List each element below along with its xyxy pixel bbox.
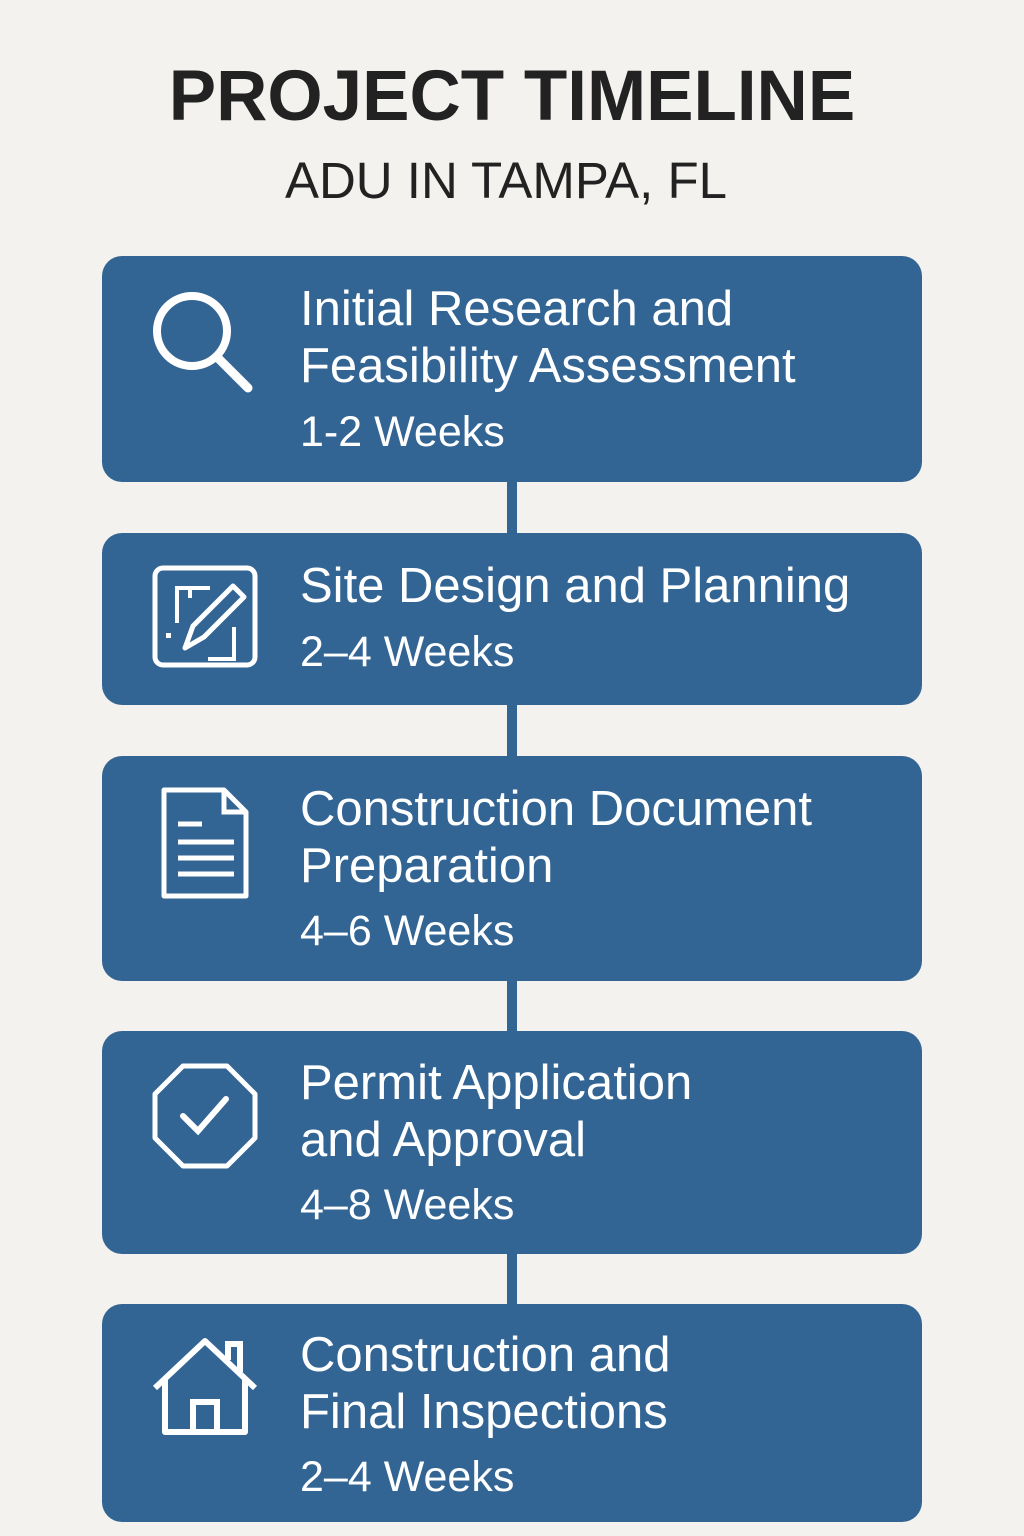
text: Construction Document	[300, 782, 812, 836]
text: Preparation	[300, 839, 553, 893]
connector	[507, 1252, 517, 1308]
duration: 1-2 Weeks	[300, 408, 505, 456]
icon: document	[162, 788, 248, 898]
text	[300, 282, 796, 393]
duration: 2–4 Weeks	[300, 1453, 514, 1501]
connector	[507, 979, 517, 1035]
text	[300, 1328, 670, 1439]
text: Feasibility Assessment	[300, 339, 796, 393]
duration: 4–6 Weeks	[300, 907, 514, 955]
subtitle: ADU IN TAMPA, FL	[285, 152, 727, 209]
text: Initial Research and	[300, 282, 733, 336]
card 5	[102, 1304, 922, 1522]
icon: magnifier	[153, 292, 252, 392]
icon: house	[153, 1338, 257, 1435]
card 2	[102, 533, 922, 705]
connector	[507, 480, 517, 536]
card 4	[102, 1031, 922, 1254]
text: Construction and	[300, 1328, 670, 1382]
text	[300, 782, 812, 893]
text	[300, 1056, 692, 1167]
duration: 2–4 Weeks	[300, 628, 514, 676]
icon: check octagon	[152, 1064, 258, 1168]
text: Site Design and Planning	[300, 559, 850, 613]
card 1	[102, 256, 922, 482]
text: Permit Application	[300, 1056, 692, 1110]
card 3	[102, 756, 922, 981]
text: Final Inspections	[300, 1385, 668, 1439]
duration: 4–8 Weeks	[300, 1181, 514, 1229]
title: PROJECT TIMELINE	[169, 57, 855, 136]
connector	[507, 703, 517, 759]
text: and Approval	[300, 1113, 586, 1167]
icon: design	[152, 566, 258, 668]
